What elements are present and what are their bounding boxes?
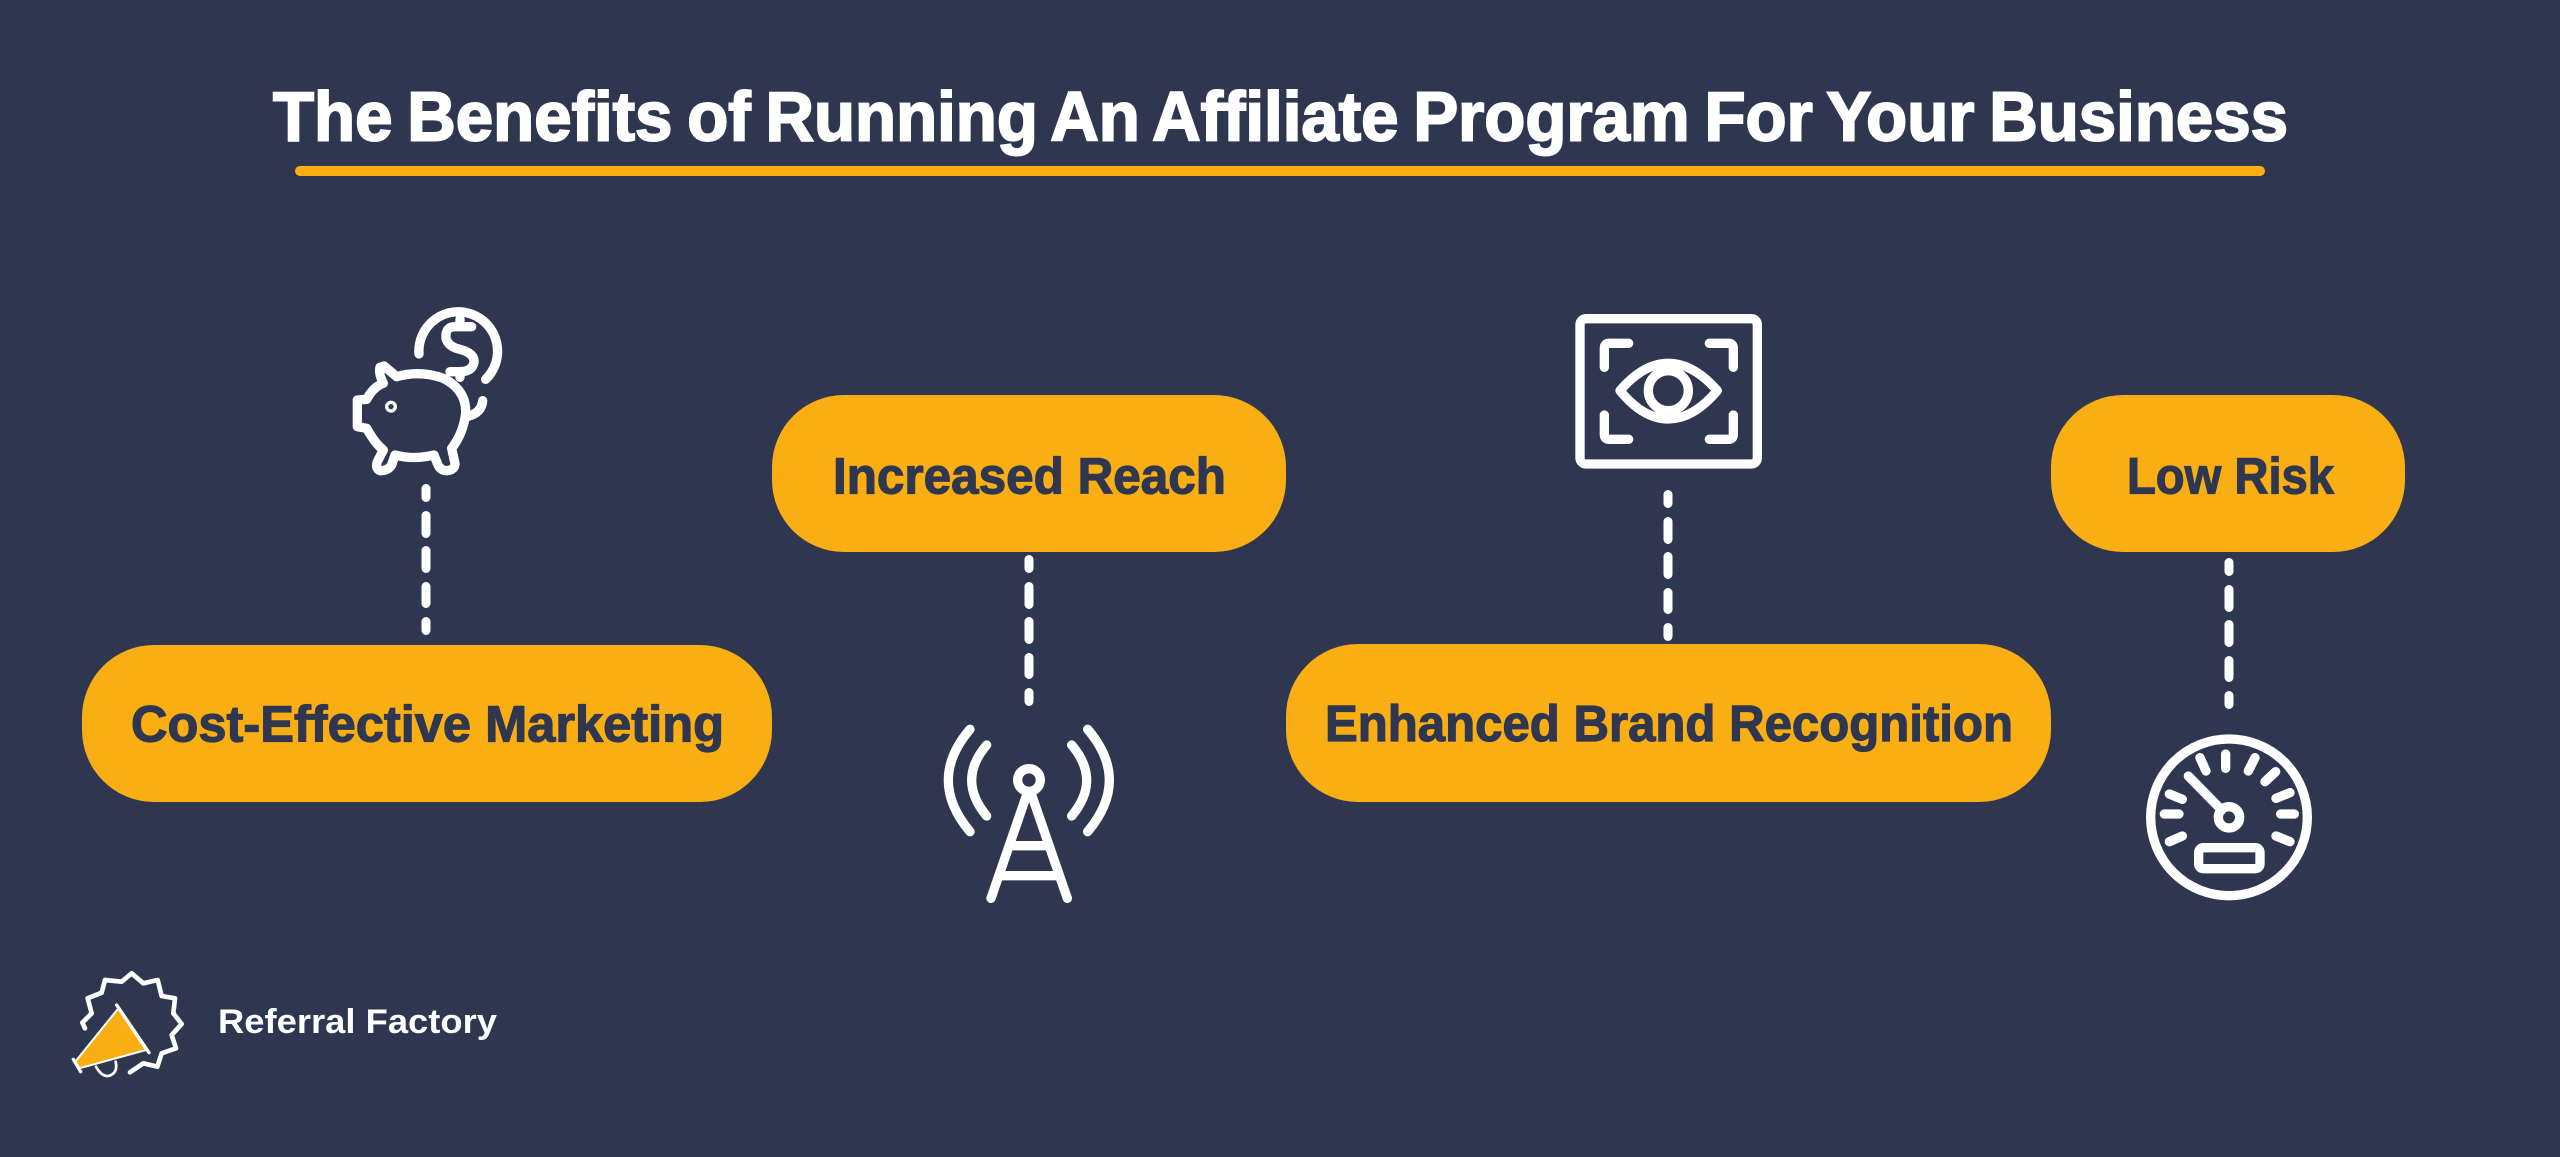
pill: Cost-Effective Marketing — [82, 645, 772, 802]
pill: Cost-Effective Marketing: Cost-Effective Marketing — [131, 696, 724, 752]
pill: Increased Reach — [772, 395, 1286, 552]
pill: Low Risk: Low Risk — [2127, 448, 2335, 504]
connector: dashed line — [1024, 560, 1034, 702]
connector: dashed line — [2224, 562, 2234, 704]
icon: megaphone in starburst — [73, 973, 182, 1076]
panel: increased reach — [772, 395, 1286, 898]
logo wordmark: Referral Factory — [218, 1003, 497, 1041]
panel: low risk — [2051, 395, 2405, 896]
icon: radio tower — [948, 729, 1109, 898]
pill: Low Risk — [2051, 395, 2405, 552]
connector: dashed line — [1664, 494, 1672, 636]
icon: eye in frame — [1580, 319, 1757, 464]
connector: dashed line — [422, 488, 430, 630]
pill: Enhanced Brand Recognition — [1286, 644, 2051, 802]
pill: Increased Reach: Increased Reach — [833, 448, 1226, 504]
panel: enhanced brand recognition — [1286, 319, 2051, 802]
panel: cost-effective marketing — [82, 312, 772, 802]
logo: Referral Factory — [73, 973, 497, 1076]
title: The Benefits of Running An Affiliate Program For Your Business — [273, 78, 2288, 156]
pill: Enhanced Brand Recognition: Enhanced Brand Recognition — [1325, 695, 2013, 752]
icon: speedometer — [2151, 739, 2307, 896]
icon: piggy bank with dollar coin — [357, 312, 498, 471]
